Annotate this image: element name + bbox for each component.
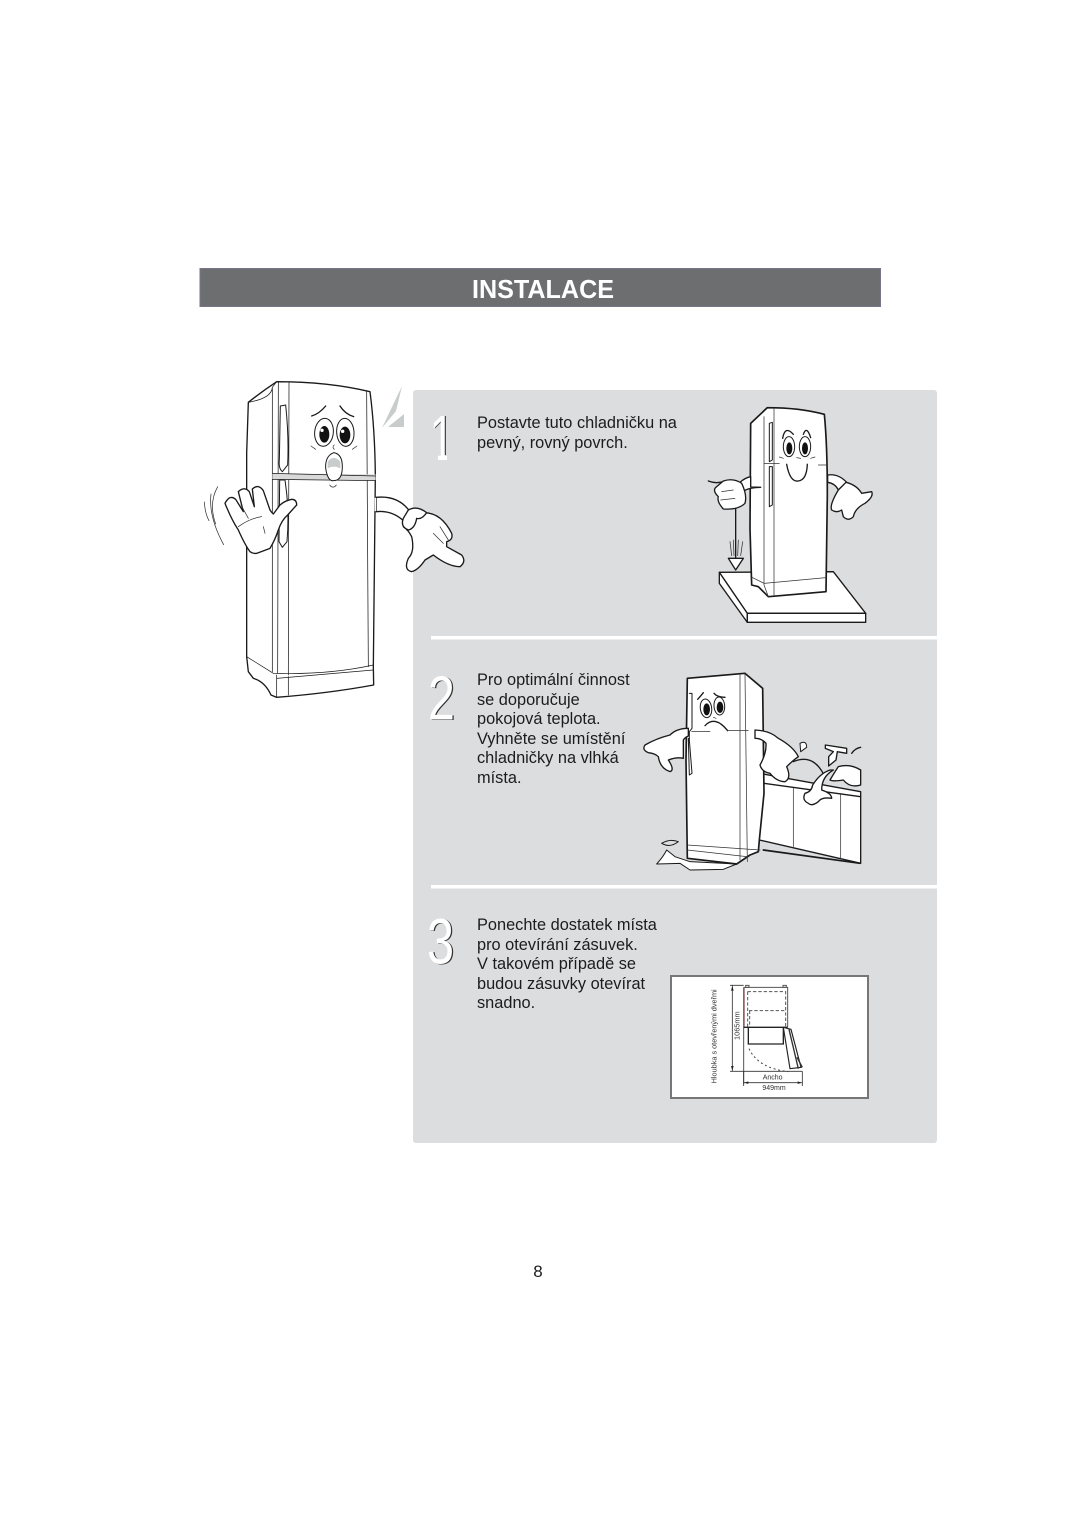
handle [688,693,692,775]
step 3 text: snadno. [477,994,535,1012]
diagram: door clearance [671,976,868,1098]
handles [769,422,772,507]
left hand [644,728,688,772]
vertical labels: Hloubka s otevřenými dveřmi [711,989,718,1083]
right arm [376,497,410,521]
step 1 text: pevný, rovný povrch. [477,434,628,452]
step 2 text: pokojová teplota. [477,710,601,728]
door seam [272,473,376,480]
left arm and fist holding plumb [708,477,761,570]
splashing water [804,766,861,805]
right hand [755,730,798,782]
fridge plan [744,985,802,1084]
base slab [719,572,866,622]
title: INSTALACE [472,276,614,304]
step 1 text: Postavte tuto chladničku na [477,414,678,432]
illustration: startled fridge with raised hand [204,382,464,697]
step 3 text: pro otevírání zásuvek. [477,936,638,954]
kitchen counter [759,759,861,863]
step number 3: 3 [427,907,454,978]
step number 1: 1 [431,402,456,474]
fridge body [750,408,827,597]
diagram: door clearance: 1065mm [733,1011,742,1040]
glove cuff [402,508,427,530]
step 2 text: Pro optimální činnost [477,671,630,689]
illustration: sad fridge in damp kitchen [644,673,861,870]
step 2 text: Vyhněte se umístění [477,730,626,748]
step number 2: 2 [429,664,456,733]
warning accent [382,386,404,428]
face [779,430,815,481]
right arm and hand [828,475,872,519]
fridge body [247,382,375,697]
diagram: door clearance: 949mm [762,1085,786,1092]
left hand [225,487,297,553]
step 2 text [477,671,630,787]
step 1 text [477,414,678,452]
face [698,693,728,731]
step number 3: 3 [428,908,455,979]
illustration: level fridge with plumb line [708,408,872,622]
step 2 text: chladničky na vlhká [477,749,620,767]
step 3 text: V takovém případě se [477,955,636,973]
right hand [403,513,464,572]
step number 1 [434,416,447,460]
step 3 text: budou zásuvky otevírat [477,975,646,993]
page number: 8 [533,1262,543,1281]
step 2 text: se doporučuje [477,691,580,709]
fridge body [686,673,764,864]
step 3 text: Ponechte dostatek místa [477,916,658,934]
header bar [200,268,880,306]
puddle [657,840,737,870]
step number 1: 1 [430,402,454,474]
motion lines [204,487,224,545]
face [311,406,357,487]
step 3 text [477,916,658,1012]
handles [279,405,288,547]
dimension lines [730,985,802,1086]
panel: installation steps [413,390,937,1143]
diagram frame [671,976,868,1098]
step number 2: 2 [428,664,455,733]
width labels: Ancho [763,1075,783,1082]
step 2 text: místa. [477,769,522,787]
faucet [800,742,861,766]
